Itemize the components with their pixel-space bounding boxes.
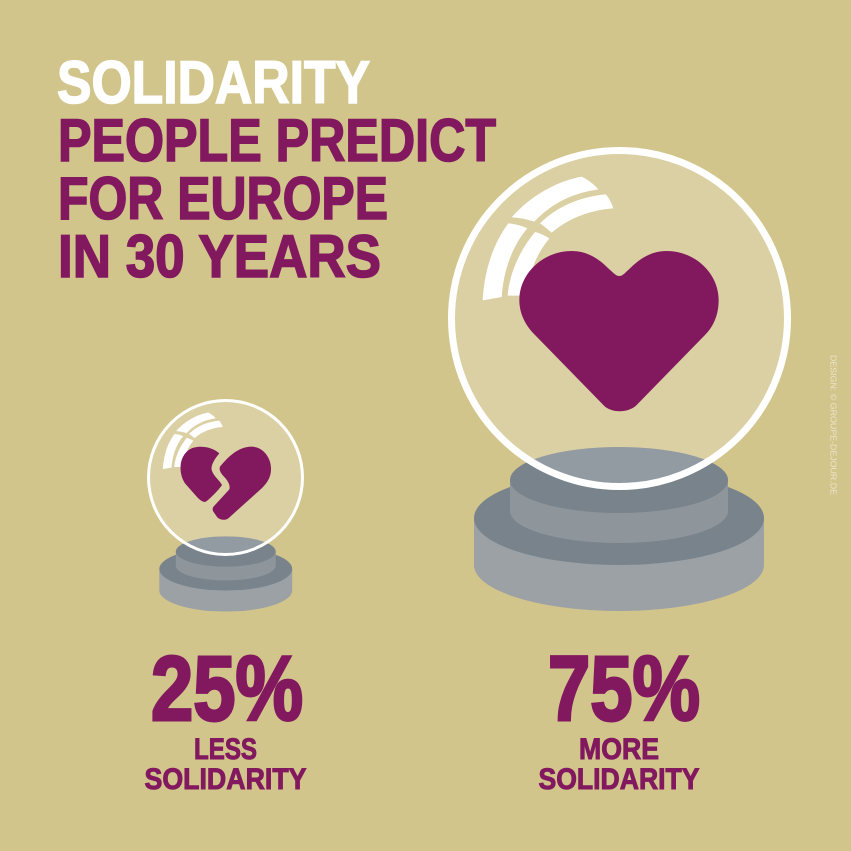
title line: people predict: PEOPLE PREDICT	[58, 107, 496, 174]
label: solidarity: SOLIDARITY	[538, 763, 700, 796]
title line: solidarity: SOLIDARITY	[57, 49, 370, 116]
glass highlight: small	[163, 412, 223, 469]
stat: 25% less solidarity	[144, 638, 306, 796]
number: 75%: 75%	[548, 638, 700, 740]
number: 25%: 25%	[151, 638, 303, 740]
glass globe: small	[148, 400, 302, 554]
label: solidarity: SOLIDARITY	[144, 763, 306, 796]
title	[57, 49, 496, 290]
stat: 75% more solidarity	[538, 638, 700, 796]
glass globe: large	[452, 150, 788, 486]
design credit: DESIGN: © GROUPE-DEJOUR.DE	[828, 355, 838, 495]
title line: for europe: FOR EUROPE	[58, 165, 388, 232]
icon: whole heart	[519, 251, 719, 411]
pedestal: small	[159, 536, 292, 612]
glass highlight: large	[483, 177, 613, 300]
icon: broken heart	[181, 447, 271, 520]
label: less: LESS	[194, 733, 257, 766]
pedestal: large	[474, 447, 764, 611]
label: more: MORE	[579, 733, 659, 766]
title line: in 30 years: IN 30 YEARS	[58, 223, 381, 290]
icon: small crystal ball with broken heart	[148, 400, 302, 612]
icon: large crystal ball with heart	[452, 150, 788, 611]
